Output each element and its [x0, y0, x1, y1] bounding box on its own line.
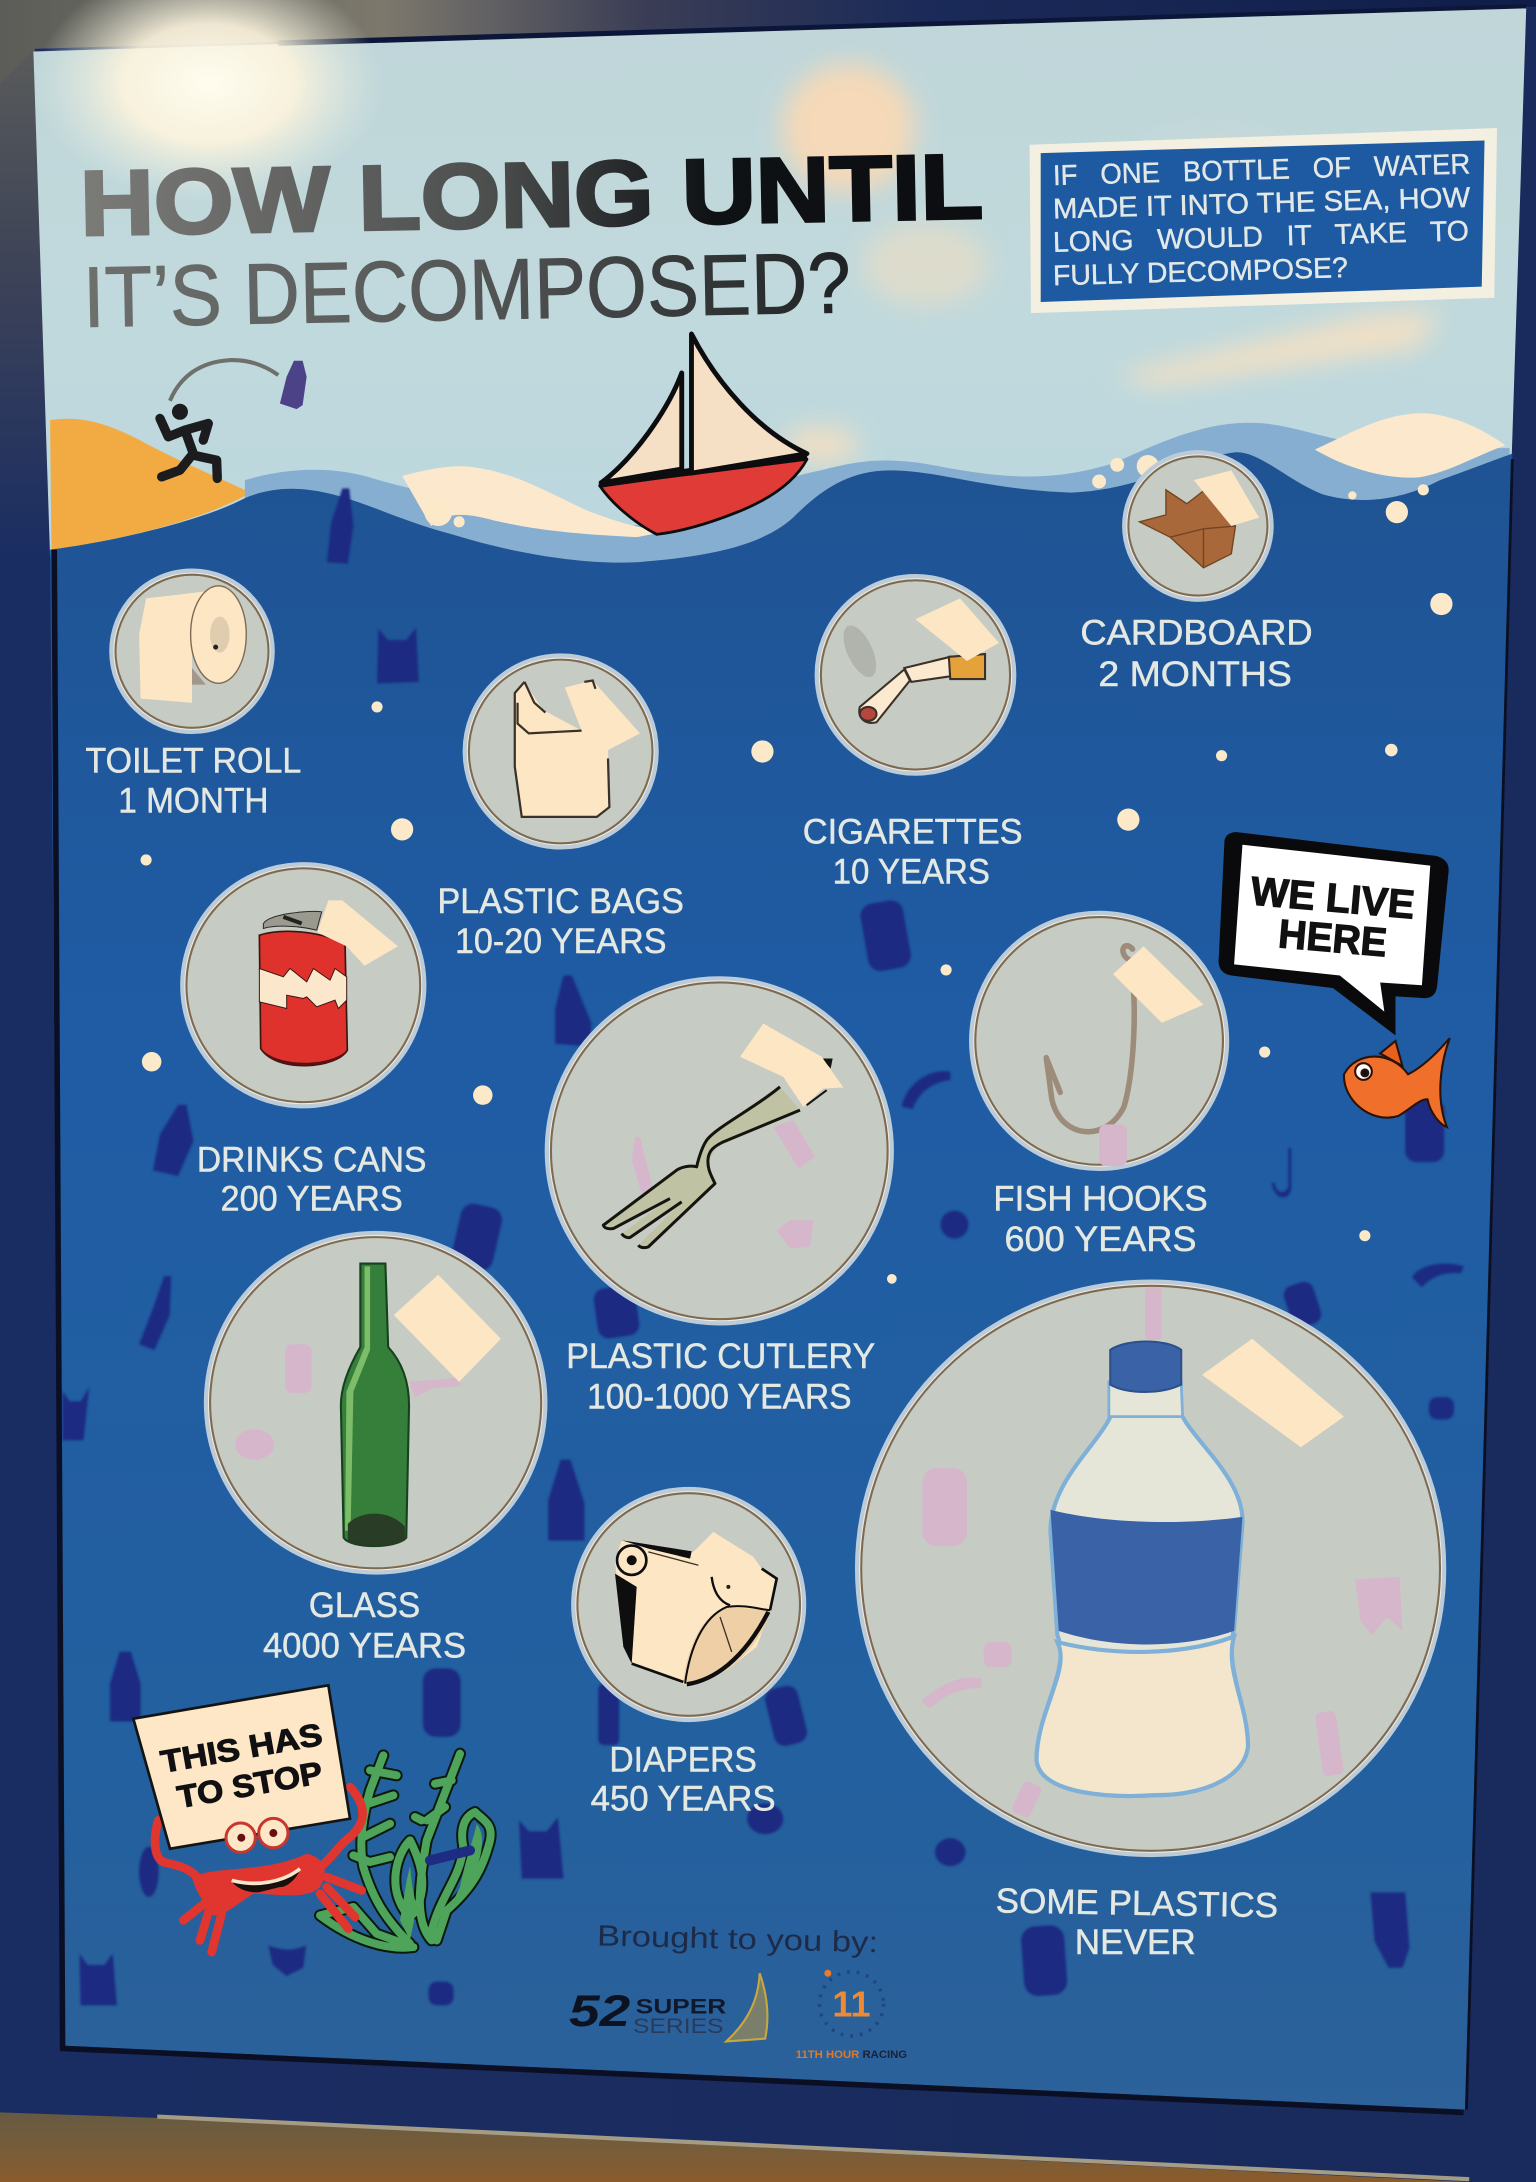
info box: IF ONE BOTTLE OF WATER	[1053, 148, 1471, 192]
label: fish hooks: FISH HOOKS	[993, 1181, 1208, 1219]
sand bank	[50, 419, 250, 550]
label: glass: 4000 YEARS	[263, 1627, 466, 1665]
label: diapers: 450 YEARS	[591, 1780, 776, 1818]
glare: cardboard circle	[1194, 470, 1259, 526]
logo: 11th hour racing: 11	[832, 1983, 871, 2024]
boat	[600, 334, 807, 534]
label: toilet roll: 1 MONTH	[118, 783, 269, 821]
glare: can circle	[317, 900, 398, 966]
glare: glass circle	[394, 1275, 501, 1382]
icon: wine bottle	[341, 1264, 409, 1546]
label: some plastics: SOME PLASTICS	[995, 1882, 1278, 1925]
title	[79, 136, 984, 346]
label: plastic cutlery	[566, 1338, 875, 1416]
circle: cardboard	[1124, 452, 1272, 600]
title: IT’S DECOMPOSED?	[82, 235, 852, 346]
speech bubble: we live here: WE LIVE	[1249, 867, 1416, 928]
glare: hook circle	[1113, 946, 1203, 1023]
circle: diapers	[573, 1489, 804, 1720]
icon: orange fish	[1344, 1038, 1450, 1127]
info box	[1030, 128, 1497, 313]
circle: cigarettes	[817, 576, 1014, 774]
logo: 52 super series	[569, 1973, 767, 2041]
label: toilet roll: TOILET ROLL	[86, 742, 301, 780]
label: fish hooks	[993, 1181, 1208, 1259]
light wave band	[245, 423, 1510, 584]
speech bubble: we live here	[1219, 832, 1449, 1035]
label: drinks cans	[197, 1142, 426, 1219]
label: plastic bags: PLASTIC BAGS	[438, 883, 684, 921]
circle: toilet roll	[111, 571, 273, 732]
poster shadow edge	[54, 459, 1512, 2112]
circle: some plastics	[857, 1282, 1444, 1855]
label: some plastics: NEVER	[1075, 1924, 1196, 1962]
thrower figure	[160, 360, 307, 478]
label: glass: GLASS	[309, 1587, 420, 1625]
label: cigarettes	[803, 813, 1023, 892]
label: fish hooks: 600 YEARS	[1005, 1221, 1197, 1259]
icon: plastic fork and faint rubbish	[603, 1023, 843, 1249]
logo: 11th hour racing	[796, 1970, 907, 2061]
label: drinks cans: 200 YEARS	[221, 1181, 403, 1219]
icon: water bottle	[1037, 1341, 1248, 1796]
logo: 11th hour racing: 11TH HOUR RACING	[796, 2049, 907, 2061]
label: cardboard: CARDBOARD	[1080, 614, 1313, 652]
title: HOW LONG UNTIL	[79, 136, 984, 255]
label: plastic bags: 10-20 YEARS	[455, 923, 666, 961]
label: toilet roll	[86, 742, 301, 821]
label: some plastics	[995, 1882, 1278, 1962]
floating rubbish silhouettes	[63, 488, 1464, 2005]
label: diapers	[591, 1741, 776, 1818]
label: cardboard	[1080, 614, 1313, 694]
sea	[50, 452, 1512, 2110]
glare: cigarette circle	[915, 598, 999, 661]
icon: cigarette butt	[859, 654, 985, 723]
bubbles	[141, 455, 1453, 1284]
foam	[402, 413, 1505, 537]
speech bubble: we live here: HERE	[1277, 910, 1389, 966]
seaweed	[320, 1754, 491, 1948]
circle: glass	[206, 1233, 545, 1572]
label: cigarettes: CIGARETTES	[803, 813, 1023, 851]
crab	[155, 1787, 363, 1952]
logo: 52 super series: SERIES	[633, 2015, 723, 2038]
label: plastic cutlery: 100-1000 YEARS	[587, 1378, 851, 1416]
icon: fish hook	[1046, 946, 1134, 1132]
sign: TO STOP	[175, 1755, 325, 1815]
label: plastic cutlery: PLASTIC CUTLERY	[566, 1338, 875, 1376]
logo: 52 super series: 52	[569, 1987, 631, 2036]
label: glass	[263, 1587, 466, 1665]
logo: 52 super series: SUPER	[636, 1996, 726, 2019]
crab mouth	[232, 1870, 300, 1892]
label: cigarettes: 10 YEARS	[833, 854, 990, 892]
icon: drink can	[259, 911, 347, 1066]
circle: plastic bags	[465, 655, 657, 847]
pink rubbish near hook	[1099, 1124, 1127, 1166]
sign	[133, 1685, 350, 1849]
crab with sign	[133, 1685, 363, 1952]
sign: THIS HAS	[158, 1717, 325, 1780]
pink rubbish in large circle	[921, 1287, 1402, 1819]
label: plastic bags	[438, 883, 684, 961]
info box: LONG WOULD IT TAKE TO	[1053, 215, 1469, 259]
label: cardboard: 2 MONTHS	[1098, 656, 1292, 694]
crab eyes	[226, 1818, 288, 1852]
poster sky	[33, 0, 1526, 557]
credit line: Brought to you by:	[597, 1920, 878, 1959]
circle: fish hooks	[971, 913, 1227, 1169]
pink rubbish in glass circle	[235, 1344, 461, 1460]
label: drinks cans: DRINKS CANS	[197, 1142, 426, 1180]
label: diapers: DIAPERS	[609, 1741, 757, 1779]
icon: diaper	[615, 1532, 777, 1685]
circle: drinks cans	[182, 864, 424, 1106]
info box: FULLY DECOMPOSE?	[1053, 252, 1348, 292]
icon: cardboard box	[1139, 490, 1235, 568]
circle: plastic cutlery	[547, 978, 892, 1323]
icon: plastic bag	[515, 680, 640, 817]
info box: MADE IT INTO THE SEA, HOW	[1053, 182, 1471, 225]
icon: toilet roll	[139, 586, 246, 703]
glare: bottle circle	[1202, 1339, 1344, 1447]
